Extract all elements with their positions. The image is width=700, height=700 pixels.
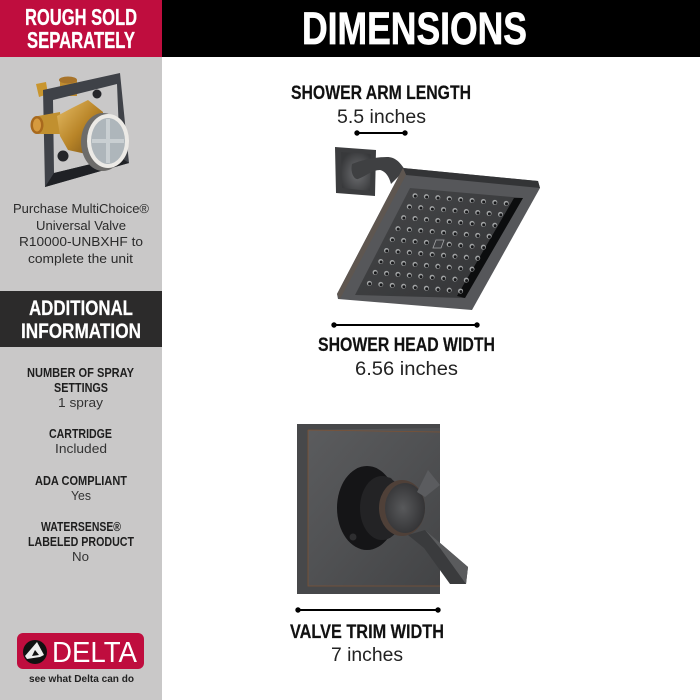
header band: dimensions	[162, 0, 700, 57]
spec: ada compliant: Yes	[71, 488, 91, 503]
flange	[335, 147, 376, 196]
spec: watersense: LABELED PRODUCT	[28, 535, 134, 549]
heading: additional information: INFORMATION	[21, 320, 141, 343]
neck	[360, 476, 404, 540]
text block: purchase note	[13, 201, 149, 266]
nozzles	[367, 193, 509, 294]
title: DIMENSIONS	[302, 3, 527, 54]
shower head	[335, 147, 540, 310]
heading: additional information	[0, 291, 162, 347]
label: valve trim width: VALVE TRIM WIDTH	[290, 622, 444, 643]
head outer	[337, 168, 540, 310]
header band: rough sold separately: ROUGH SOLD	[25, 4, 137, 30]
upper tab	[417, 470, 440, 497]
spec: watersense: WATERSENSE®	[41, 520, 122, 534]
label: shower head width	[318, 335, 495, 380]
spec: spray settings: SETTINGS	[54, 381, 108, 395]
arrow: valve width measure	[295, 607, 441, 613]
text block: purchase note: R10000-UNBXHF to	[19, 234, 143, 249]
spec: watersense: No	[72, 549, 89, 564]
head face	[355, 188, 523, 298]
escutcheon	[337, 466, 397, 550]
label: shower arm length: SHOWER ARM LENGTH	[291, 83, 471, 104]
header band: rough sold separately: SEPARATELY	[27, 27, 135, 53]
lever	[408, 530, 468, 584]
label: shower arm length: 5.5 inches	[337, 106, 426, 128]
logo: delta: see what Delta can do	[29, 673, 134, 685]
text block: purchase note: complete the unit	[28, 251, 133, 266]
spec: cartridge	[49, 427, 112, 456]
shower arm	[351, 157, 405, 184]
label: valve trim width	[290, 622, 444, 666]
spec: spray settings: 1 spray	[58, 395, 104, 410]
spec: spray settings: NUMBER OF SPRAY	[27, 366, 135, 380]
icon: rough-in valve	[30, 73, 129, 187]
centre square	[432, 238, 444, 248]
label: shower head width: 6.56 inches	[355, 358, 458, 380]
label: shower arm length	[291, 83, 471, 136]
spec: cartridge: CARTRIDGE	[49, 427, 112, 441]
label: shower head width: SHOWER HEAD WIDTH	[318, 335, 495, 356]
plate	[297, 424, 440, 594]
spec: ada compliant	[35, 474, 127, 503]
spec: spray settings	[27, 366, 135, 410]
label: valve trim width: 7 inches	[331, 644, 403, 666]
panel: left sidebar	[0, 0, 162, 700]
valve trim	[297, 424, 468, 594]
spec: ada compliant: ADA COMPLIANT	[35, 474, 127, 488]
spec: watersense	[28, 520, 134, 564]
text block: purchase note: Purchase MultiChoice®	[13, 201, 149, 216]
header band: rough sold separately	[0, 0, 162, 57]
arrow: arm length measure	[354, 130, 408, 136]
heading: additional information: ADDITIONAL	[29, 297, 133, 320]
logo: delta: DELTA	[52, 637, 138, 669]
arrow: head width measure	[331, 322, 480, 328]
text block: purchase note: Universal Valve	[36, 218, 126, 233]
spec: cartridge: Included	[55, 441, 107, 456]
knob	[379, 480, 425, 536]
logo: delta	[17, 633, 144, 685]
